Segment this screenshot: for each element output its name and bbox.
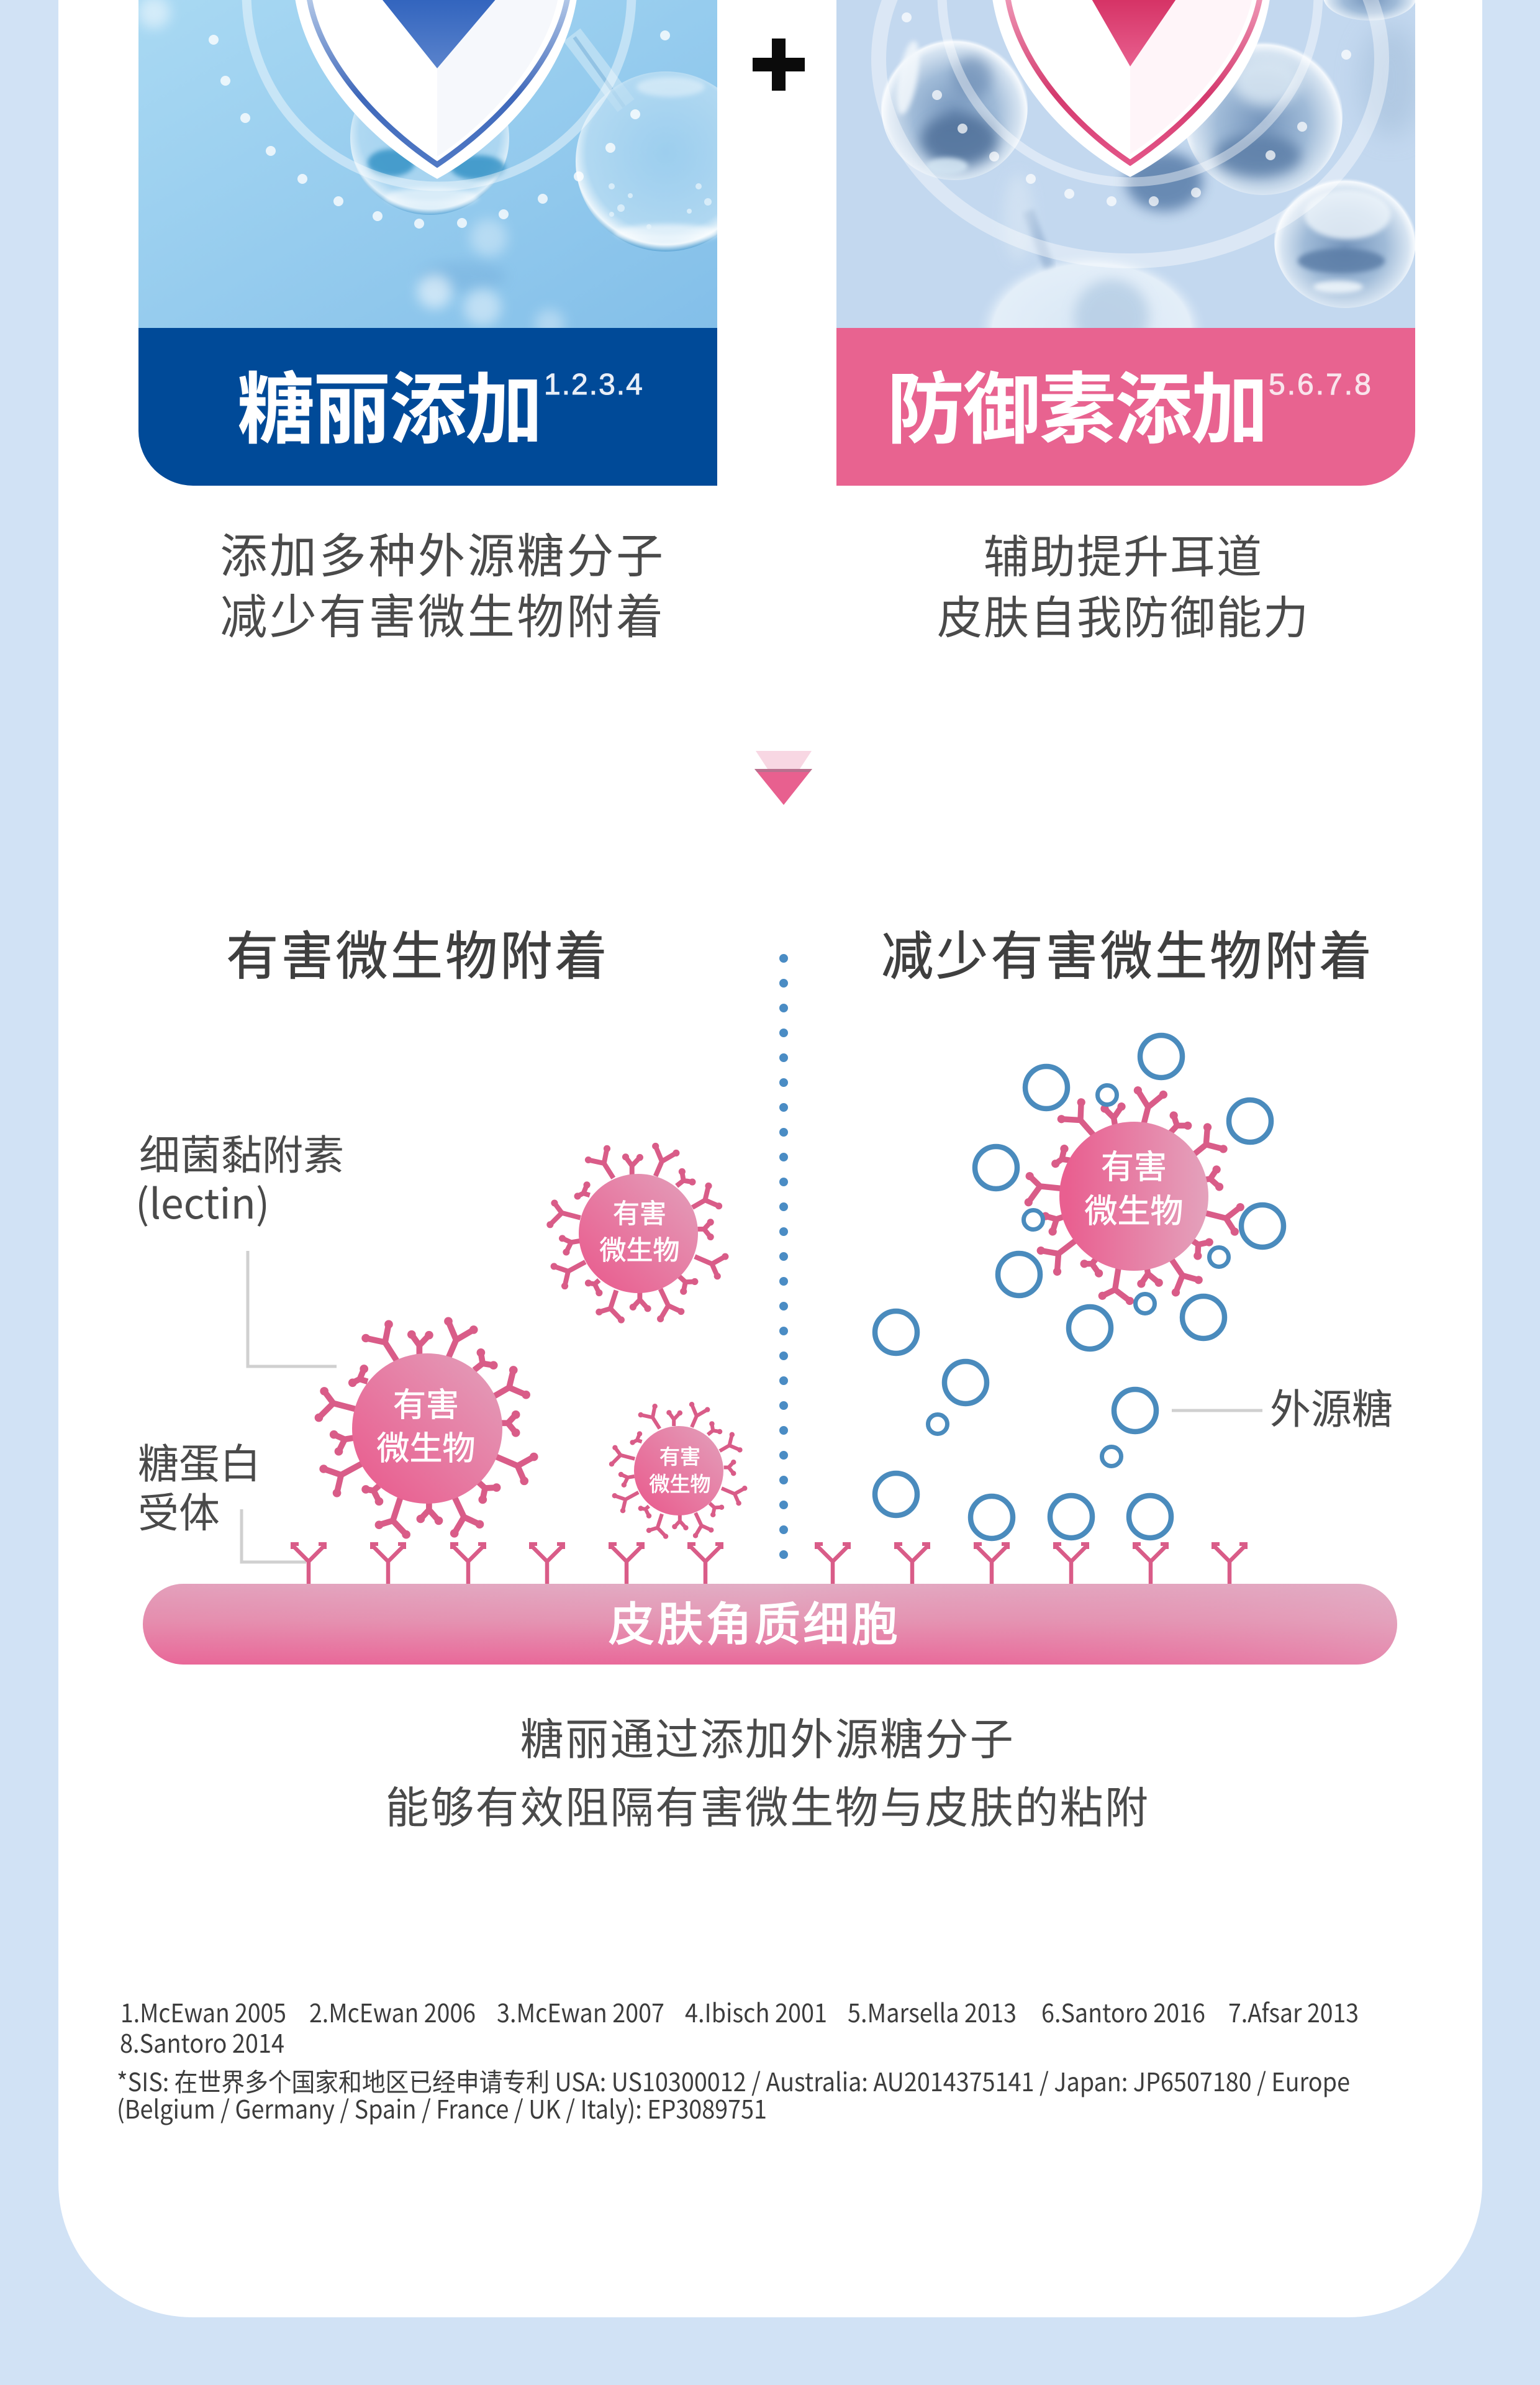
band: blue title bbox=[138, 328, 717, 486]
text: description right: 皮肤自我防御能力 bbox=[937, 581, 1310, 647]
heading: 糖丽添加: 糖丽添加 bbox=[237, 347, 541, 459]
image: blue shield with water globes bbox=[138, 0, 756, 339]
leader line: exogenous sugar bbox=[1172, 1409, 1262, 1412]
microbe: large: 有害 bbox=[393, 1379, 459, 1426]
footnotes: references: 8.Santoro 2014 bbox=[120, 2023, 284, 2060]
microbe: upper bbox=[550, 1146, 725, 1320]
label: glycoprotein receptor: 糖蛋白 bbox=[138, 1431, 261, 1491]
icon: plus sign bbox=[753, 39, 805, 91]
text: description right bbox=[937, 520, 1310, 647]
bar: skin keratinocytes: 皮肤角质细胞 bbox=[609, 1588, 900, 1654]
footnotes: references: 6.Santoro 2016 bbox=[1041, 1992, 1205, 2030]
label: lectin: 细菌黏附素 bbox=[139, 1122, 344, 1182]
text: conclusion bbox=[386, 1705, 1149, 1836]
arrow: double down triangle bbox=[754, 751, 812, 805]
heading: reduced adhesion: 减少有害微生物附着 bbox=[881, 915, 1374, 990]
microbe: upper: 有害 bbox=[613, 1192, 666, 1231]
footnotes: references: 7.Afsar 2013 bbox=[1228, 1992, 1359, 2030]
text: conclusion: 能够有效阻隔有害微生物与皮肤的粘附 bbox=[386, 1773, 1149, 1836]
sugar rings bbox=[875, 1035, 1284, 1538]
microbe: upper: 微生物 bbox=[600, 1229, 679, 1268]
panel: sugar addition bbox=[138, 0, 756, 647]
footnotes: patent: (Belgium / Germany / Spain / France / UK / Italy): EP3089751 bbox=[117, 2089, 767, 2126]
microbe: small bbox=[612, 1404, 745, 1537]
text: description left: 添加多种外源糖分子 bbox=[220, 518, 666, 586]
text: description right: 辅助提升耳道 bbox=[984, 520, 1263, 586]
footnotes: references bbox=[120, 1992, 1359, 2060]
divider: dotted line bbox=[779, 958, 788, 1559]
text: description left bbox=[220, 518, 666, 647]
microbe: coated with sugars: 有害 bbox=[1101, 1141, 1167, 1188]
receptors: right group bbox=[817, 1544, 1246, 1585]
text: conclusion: 糖丽通过添加外源糖分子 bbox=[520, 1705, 1015, 1768]
microbe: coated with sugars bbox=[1014, 1078, 1252, 1314]
receptors: left group bbox=[292, 1544, 722, 1585]
heading: harmful microbes adhesion: 有害微生物附着 bbox=[226, 915, 610, 990]
label: lectin bbox=[135, 1122, 344, 1231]
microbe: small: 有害 bbox=[659, 1440, 700, 1470]
footnotes: references: 4.Ibisch 2001 bbox=[685, 1992, 827, 2030]
label: exogenous sugar: 外源糖 bbox=[1270, 1376, 1393, 1436]
footnotes: references: 5.Marsella 2013 bbox=[848, 1992, 1017, 2030]
leader line: receptor bbox=[242, 1509, 306, 1562]
footnotes: references: 2.McEwan 2006 bbox=[309, 1992, 476, 2030]
footnotes: patent bbox=[117, 2061, 1350, 2126]
text: description left: 减少有害微生物附着 bbox=[220, 579, 666, 647]
bar: skin keratinocytes bbox=[143, 1584, 1397, 1665]
microbe: small: 微生物 bbox=[650, 1468, 710, 1497]
footnotes: references: 1.McEwan 2005 bbox=[120, 1992, 286, 2030]
panel: defensin addition bbox=[836, 0, 1422, 647]
label: glycoprotein receptor: 受体 bbox=[138, 1480, 220, 1540]
leader line: lectin bbox=[248, 1251, 337, 1366]
label: lectin: (lectin) bbox=[135, 1171, 270, 1231]
microbe: coated with sugars: 微生物 bbox=[1084, 1185, 1184, 1232]
heading: 防御素添加: 防御素添加 bbox=[887, 347, 1267, 459]
citation: 5.6.7.8: 5.6.7.8 bbox=[1269, 368, 1373, 401]
label: glycoprotein receptor bbox=[138, 1431, 261, 1540]
citation: 1.2.3.4: 1.2.3.4 bbox=[544, 368, 644, 401]
footnotes: patent: *SIS: 在世界多个国家和地区已经申请专利 USA: US10300012 / Australia: AU2014375141 / Japan: JP6507180 / Europe bbox=[117, 2061, 1350, 2099]
microbe: large: 微生物 bbox=[376, 1422, 476, 1470]
microbe: large bbox=[319, 1321, 534, 1535]
band: pink title bbox=[836, 328, 1415, 486]
footnotes: references: 3.McEwan 2007 bbox=[497, 1992, 664, 2030]
image: pink shield with crystal spheres bbox=[836, 0, 1415, 328]
